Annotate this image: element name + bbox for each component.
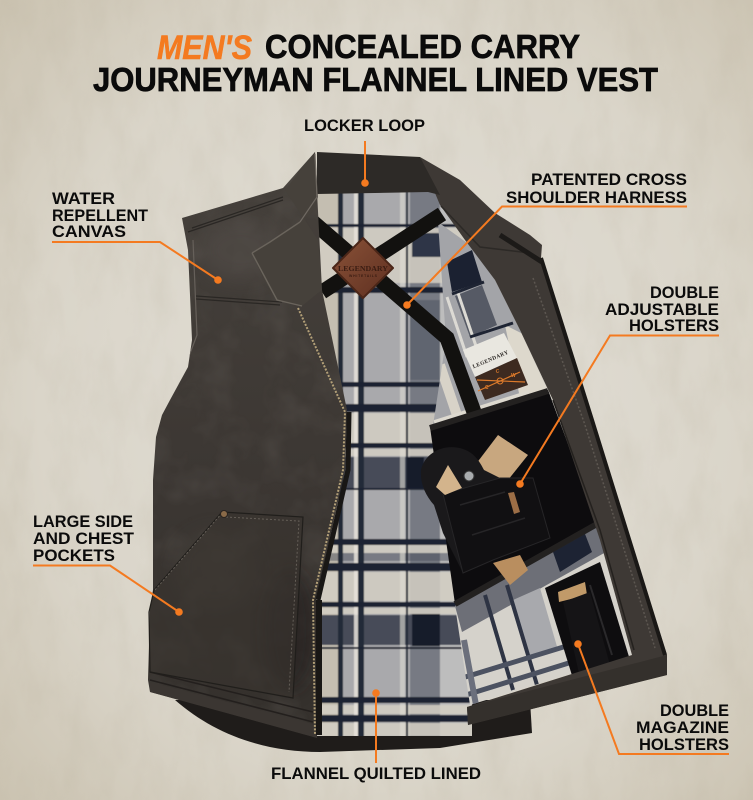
woven CCW label: C [495,368,500,375]
callout: double magazine holsters: HOLSTERS [639,735,729,754]
zipper [298,308,349,735]
quilted plaid lining centre [316,192,472,736]
collar [252,152,440,306]
callout: double adjustable holsters: ADJUSTABLE [605,300,719,319]
CONCEALED CARRY: CONCEALED CARRY [265,28,580,65]
double adjustable holster with pistol magazines [421,435,550,585]
horizontal stripes [322,224,470,722]
callout: double magazine holsters [574,640,729,754]
callout: double adjustable holsters: DOUBLE [650,283,719,302]
callout: water repellent canvas: WATER [52,189,115,208]
cross shoulder harness straps [313,214,474,412]
shoulder yoke stitching [188,197,283,305]
dark bands [322,300,461,646]
callout: double magazine holsters: MAGAZINE [636,718,729,737]
JOURNEYMAN FLANNEL LINED VEST: JOURNEYMAN FLANNEL LINED VEST [93,61,658,98]
callout: patented cross shoulder harness: PATENTED CROSS [531,170,687,189]
callout: large side and chest pockets [33,512,183,616]
vest photograph [140,150,667,752]
quilted plaid lining right side [420,210,640,715]
callout: patented cross shoulder harness [403,170,687,309]
callout: double magazine holsters: DOUBLE [660,701,729,720]
double magazine holster [545,562,630,682]
callout: double adjustable holsters: HOLSTERS [629,316,719,335]
callout: flannel quilted lined [271,689,481,783]
back hem [175,700,532,752]
callout: large side and chest pockets: AND CHEST [33,529,135,548]
callout: double adjustable holsters [516,283,719,488]
chest pocket stitching [149,512,303,698]
MEN'S in orange brush lettering: MEN'S [157,29,252,67]
leather patch [333,238,393,298]
leather patch: LEGENDARY [338,264,389,273]
callout: large side and chest pockets: POCKETS [33,546,115,565]
callout: large side and chest pockets: LARGE SIDE [33,512,133,531]
callout: water repellent canvas [52,189,222,284]
vertical stripes [338,185,408,745]
callout: patented cross shoulder harness: SHOULDER HARNESS [506,188,687,207]
callout: locker loop [304,116,425,187]
woven CCW label: LEGENDARY [472,350,509,370]
woven CCW label: C [485,385,489,391]
callout: flannel quilted lined: FLANNEL QUILTED LINED [271,764,481,783]
hem band [150,672,313,722]
callout: water repellent canvas: CANVAS [52,222,126,241]
callout: water repellent canvas: REPELLENT [52,206,149,225]
pocket panel edge [430,391,597,604]
woven CCW label: W [511,373,516,379]
leather patch: WHITETAILS [349,274,378,278]
right front panel [420,157,667,725]
upper black inner pocket panel [430,390,598,604]
title [93,28,658,98]
woven CCW label [463,333,528,400]
light bands [316,227,472,736]
pocket rivet [220,510,228,518]
callout: locker loop: LOCKER LOOP [304,116,425,135]
left front panel [148,152,347,738]
